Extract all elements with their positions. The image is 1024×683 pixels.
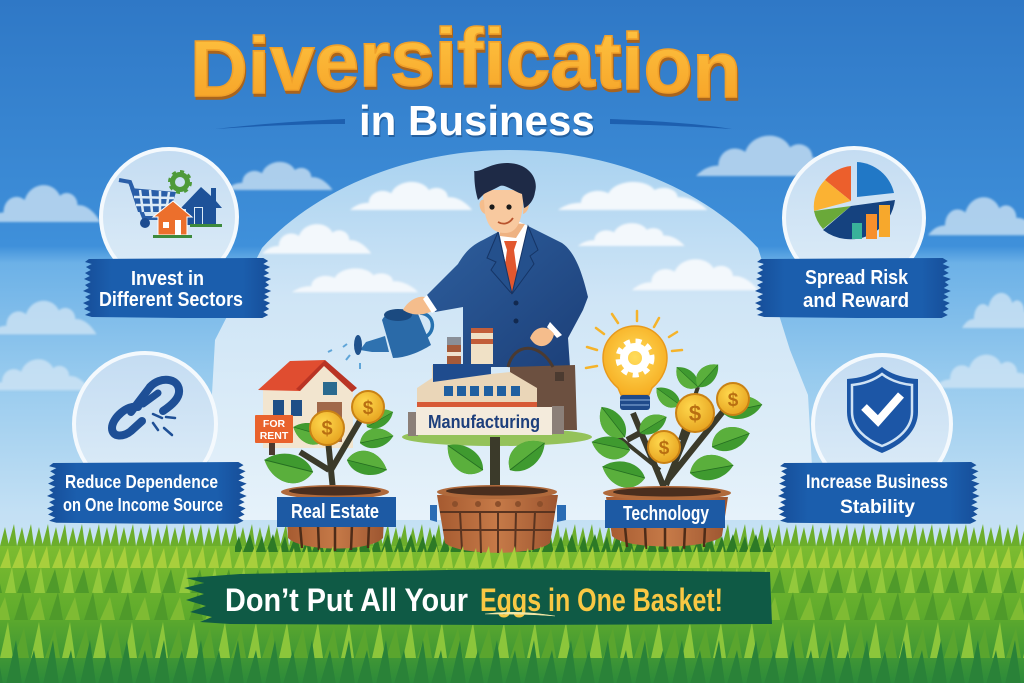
bottom slogan banner — [184, 569, 772, 625]
coin: $ — [659, 438, 670, 459]
label — [416, 407, 552, 435]
jacket — [427, 226, 588, 367]
lapels — [487, 226, 538, 294]
grass blades — [0, 546, 1024, 683]
coin — [648, 431, 680, 463]
swoosh right — [610, 119, 732, 129]
dark grass behind pots — [235, 534, 775, 552]
plant: real estate — [260, 391, 397, 490]
coin — [676, 394, 714, 432]
panel: invest in different sectors — [83, 149, 271, 318]
label text: Invest in — [131, 268, 204, 290]
label text: Reduce Dependence — [65, 472, 218, 492]
swoosh left — [215, 119, 345, 129]
coin: $ — [321, 418, 333, 440]
label — [605, 500, 725, 528]
icon: cart and houses — [119, 172, 222, 238]
plant: technology — [586, 311, 764, 492]
neck and face — [500, 222, 525, 238]
circle — [101, 149, 237, 285]
hair — [474, 163, 536, 208]
slogan text yellow: Eggs in One Basket! — [480, 582, 723, 618]
label text: Manufacturing — [428, 412, 540, 432]
icon: factory with manufacturing label — [402, 328, 592, 446]
coin: $ — [689, 401, 701, 426]
label text: Increase Business — [806, 472, 948, 493]
hand on can — [403, 297, 434, 314]
label text: Different Sectors — [99, 289, 243, 311]
shirt — [499, 222, 528, 294]
label text: on One Income Source — [63, 495, 223, 515]
label — [277, 497, 396, 527]
label text: Technology — [623, 503, 710, 525]
icon: broken chain link — [112, 380, 179, 436]
circle — [813, 355, 951, 493]
chimneys — [447, 337, 461, 367]
label text: Real Estate — [291, 501, 379, 523]
building — [417, 365, 537, 407]
circle — [74, 353, 216, 495]
subtitle — [215, 97, 732, 144]
coin — [717, 383, 749, 415]
label text: Spread Risk — [805, 267, 909, 289]
icon: house with for rent sign: FOR — [263, 418, 285, 430]
label text: and Reward — [803, 290, 909, 312]
pot: real estate — [277, 485, 396, 551]
businessman — [427, 163, 588, 367]
coin: $ — [363, 398, 374, 419]
label text — [803, 267, 909, 312]
clouds inside dome — [262, 182, 758, 292]
icon: shield with check — [847, 367, 918, 453]
label text — [63, 472, 223, 515]
coin: $ — [728, 390, 739, 411]
icon: pie chart with bars — [814, 162, 895, 239]
background dome — [205, 150, 815, 520]
cuff and hand on case — [547, 322, 562, 338]
panel: increase business stability — [778, 355, 980, 524]
panel: reduce dependence — [47, 353, 247, 524]
grass band — [0, 524, 1024, 683]
brown case — [510, 365, 577, 430]
label banner — [755, 258, 951, 318]
water drops — [328, 344, 360, 369]
light bulb — [586, 311, 682, 410]
underline — [485, 612, 555, 616]
for rent sign — [255, 415, 293, 443]
plant: manufacturing — [440, 431, 551, 492]
icon: house with for rent sign: RENT — [260, 430, 289, 442]
ground ellipse — [402, 428, 592, 446]
label banner — [47, 462, 247, 524]
clouds left and right — [0, 136, 1024, 390]
slogan text white: Don’t Put All Your — [225, 582, 468, 618]
icon: house with for rent sign — [255, 360, 357, 455]
label banner — [83, 258, 271, 318]
label banner — [778, 462, 980, 524]
tie — [503, 241, 518, 294]
cuff — [423, 295, 437, 313]
label text — [99, 268, 243, 311]
label text — [806, 472, 948, 518]
eyes and smile — [489, 204, 495, 210]
subtitle: in Business — [359, 97, 595, 144]
label text: Stability — [840, 497, 915, 518]
panel: spread risk and reward — [755, 148, 951, 318]
circle — [784, 148, 924, 288]
pot: manufacturing — [430, 485, 566, 553]
buttons — [514, 300, 518, 306]
icon: watering can — [328, 295, 437, 369]
pot: technology — [603, 486, 731, 549]
title: Diversification — [190, 12, 741, 114]
